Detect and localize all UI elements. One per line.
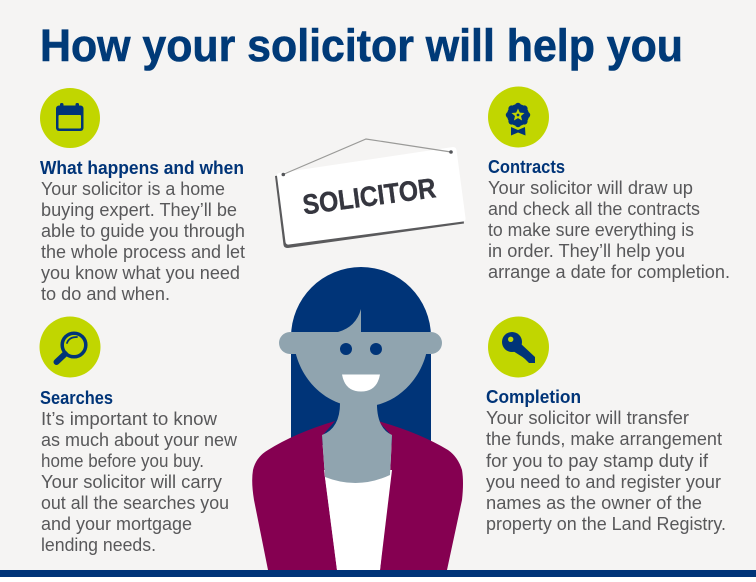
hanging sign: solicitor (275, 139, 466, 248)
shirt (324, 470, 392, 570)
hanging sign: solicitor: SOLICITOR (301, 172, 438, 220)
text block: completion: property on the Land Registry. (486, 514, 726, 534)
icon: magnifying glass (40, 316, 100, 378)
panel: searches (40, 316, 238, 555)
eyes (340, 343, 382, 355)
text block: searches: out all the searches you (41, 493, 229, 513)
footer strip (0, 577, 756, 582)
panel: what happens and when (40, 88, 245, 304)
text block: what happens and when: to do and when. (41, 284, 170, 304)
text block: searches: It’s important to know (41, 409, 218, 429)
text block: contracts: arrange a date for completion. (488, 262, 730, 282)
text block: contracts (488, 178, 730, 282)
text block: completion (486, 408, 726, 534)
text block: searches (41, 409, 238, 555)
text block: what happens and when: buying expert. They’ll be (41, 200, 237, 220)
jacket (252, 421, 463, 570)
text block: completion: you need to and register your (486, 472, 721, 492)
mouth (342, 374, 380, 392)
text block: what happens and when: Your solicitor is a home (41, 179, 225, 199)
text block: what happens and when: able to guide you through (41, 221, 245, 241)
heading: contracts: Contracts (488, 157, 565, 177)
title: How your solicitor will help you (40, 20, 683, 71)
illustration: solicitor character (252, 267, 463, 570)
text block: contracts: in order. They’ll help you (488, 241, 685, 261)
text block: searches: and your mortgage (41, 514, 192, 534)
text block: contracts: and check all the contracts (488, 199, 700, 219)
icon: rosette (488, 86, 549, 148)
icon: key (488, 316, 549, 378)
text block: searches: Your solicitor will carry (41, 472, 222, 492)
face (293, 332, 429, 407)
hair (291, 267, 431, 445)
panel: contracts (488, 86, 730, 282)
text block: completion: names as the owner of the (486, 493, 702, 513)
neck and chest (322, 400, 392, 483)
heading: searches: Searches (40, 388, 113, 408)
text block: contracts: Your solicitor will draw up (488, 178, 693, 198)
text block: searches: as much about your new (41, 430, 238, 450)
heading: completion: Completion (486, 387, 581, 407)
text block: contracts: to make sure everything is (488, 220, 694, 240)
text block: what happens and when: you know what you need (41, 263, 240, 283)
ears (279, 332, 442, 354)
footer bar (0, 570, 756, 577)
fringe gap (338, 309, 361, 332)
icon: calendar (40, 88, 100, 148)
text block: completion: for you to pay stamp duty if (486, 451, 709, 471)
text block: what happens and when: the whole process and let (41, 242, 245, 262)
panel: completion (486, 316, 726, 534)
text block: searches: home before you buy. (41, 451, 204, 471)
text block: what happens and when (41, 179, 245, 304)
text block: completion: the funds, make arrangement (486, 429, 722, 449)
text block: searches: lending needs. (41, 535, 156, 555)
text block: completion: Your solicitor will transfer (486, 408, 689, 428)
heading: what happens and when: What happens and when (40, 158, 244, 178)
